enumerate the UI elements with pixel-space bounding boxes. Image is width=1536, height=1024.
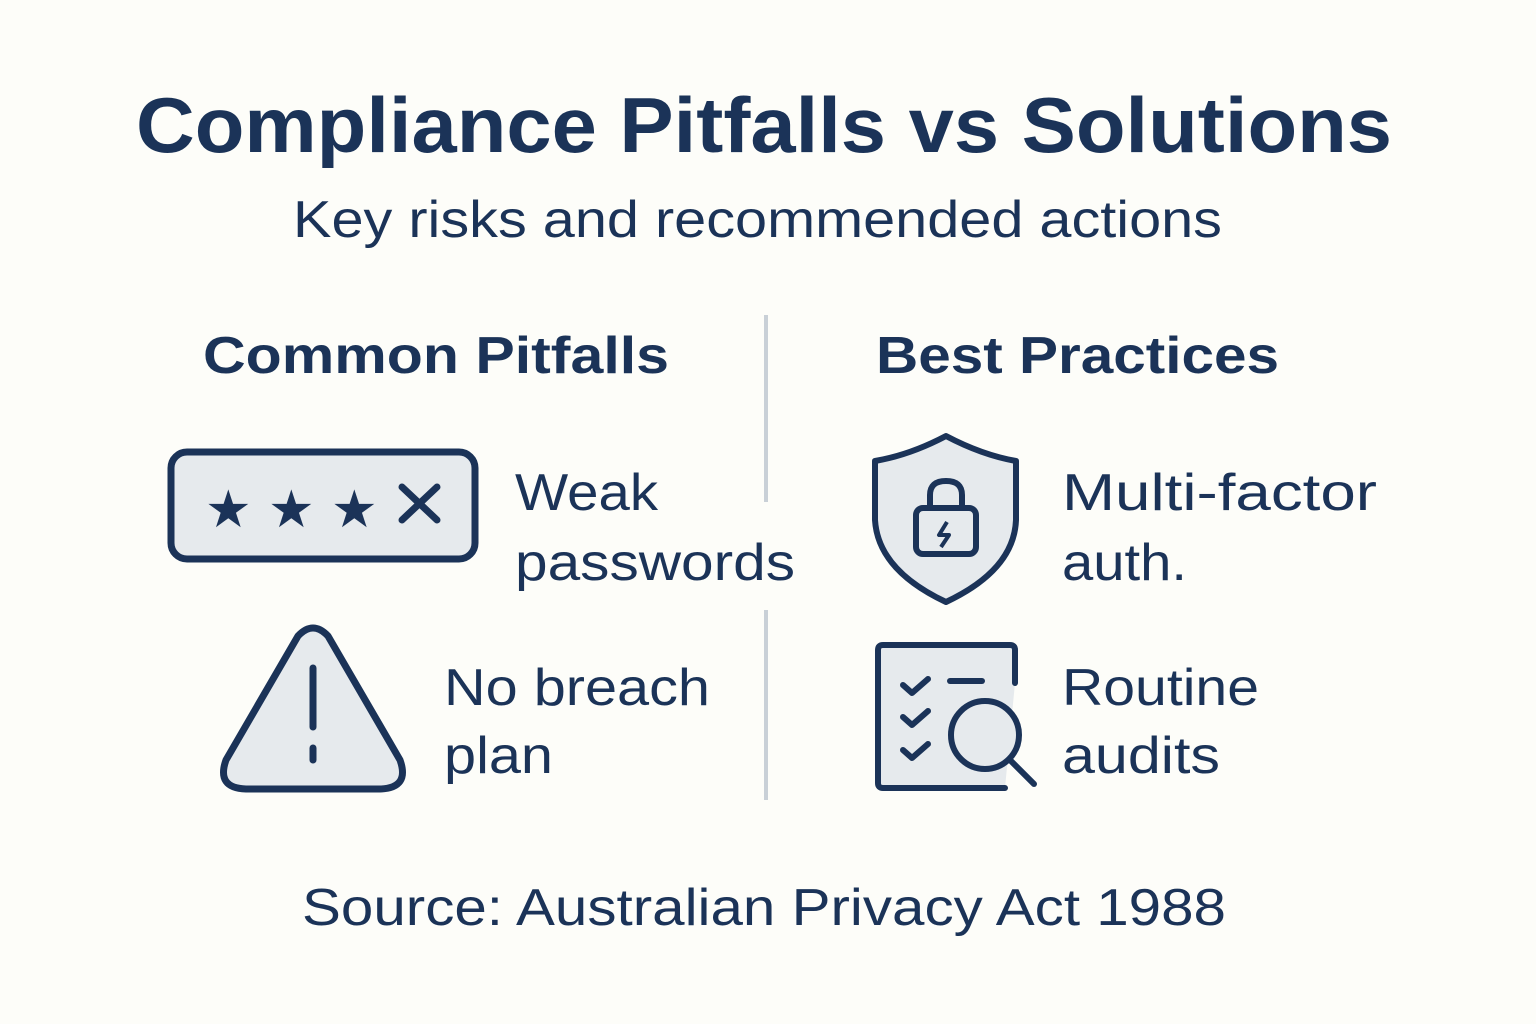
- icon: warning triangle: [224, 628, 402, 789]
- text: Multi-factor auth.: [1062, 464, 1377, 592]
- subtitle: Key risks and recommended actions: [293, 191, 1222, 249]
- icon: password field: [171, 452, 475, 559]
- text: No breach plan: plan: [444, 727, 553, 785]
- icon: shield lock: [875, 436, 1016, 602]
- text: Routine audits: Routine: [1062, 659, 1259, 717]
- text: No breach plan: No breach: [444, 659, 710, 717]
- text: Weak passwords: Weak: [515, 464, 659, 522]
- heading: Best Practices: Best Practices: [876, 327, 1279, 385]
- text: Weak passwords: passwords: [515, 534, 795, 592]
- text: No breach plan: [444, 659, 710, 785]
- icon: password field: ★: [268, 481, 315, 539]
- text: Weak passwords: [515, 464, 795, 592]
- icon: checklist with magnifier: [878, 645, 1034, 788]
- text: Routine audits: [1062, 659, 1259, 785]
- text: Routine audits: audits: [1062, 727, 1220, 785]
- icon: password field: ★: [331, 481, 378, 539]
- title: Compliance Pitfalls vs Solutions: [136, 81, 1392, 169]
- heading: Common Pitfalls: Common Pitfalls: [203, 327, 669, 385]
- icon: password field: ★: [205, 481, 252, 539]
- text: Multi-factor auth.: Multi-factor: [1062, 464, 1377, 522]
- source: Source: Australian Privacy Act 1988: [302, 879, 1226, 937]
- text: Multi-factor auth.: auth.: [1062, 534, 1187, 592]
